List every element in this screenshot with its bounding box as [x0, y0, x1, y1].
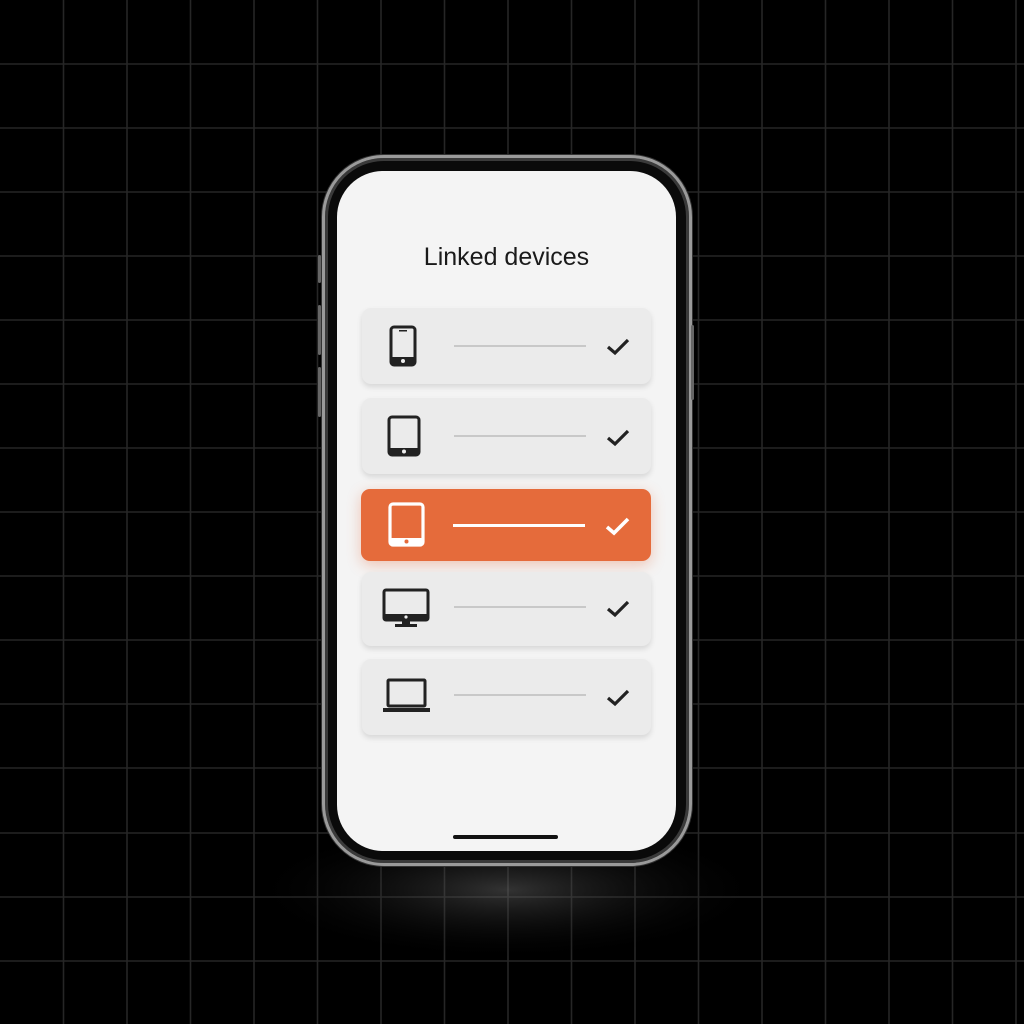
row: tablet	[362, 398, 651, 474]
check	[607, 338, 630, 356]
phone	[318, 154, 694, 867]
row: laptop	[362, 659, 651, 735]
row: phone	[362, 308, 651, 384]
check	[606, 518, 630, 536]
icon: tablet white	[388, 502, 425, 547]
home indicator	[453, 835, 558, 839]
check	[607, 690, 630, 706]
row: tablet highlighted	[361, 489, 651, 561]
phone frame	[322, 155, 692, 866]
icon: phone	[390, 326, 416, 366]
title: Linked devices	[424, 243, 589, 271]
check	[607, 430, 630, 446]
row: desktop	[362, 572, 651, 646]
icon: tablet	[388, 416, 420, 456]
side buttons	[318, 255, 321, 283]
screen	[337, 171, 676, 851]
icon: laptop	[383, 678, 430, 712]
icon: desktop monitor	[382, 588, 430, 627]
check	[607, 600, 630, 618]
